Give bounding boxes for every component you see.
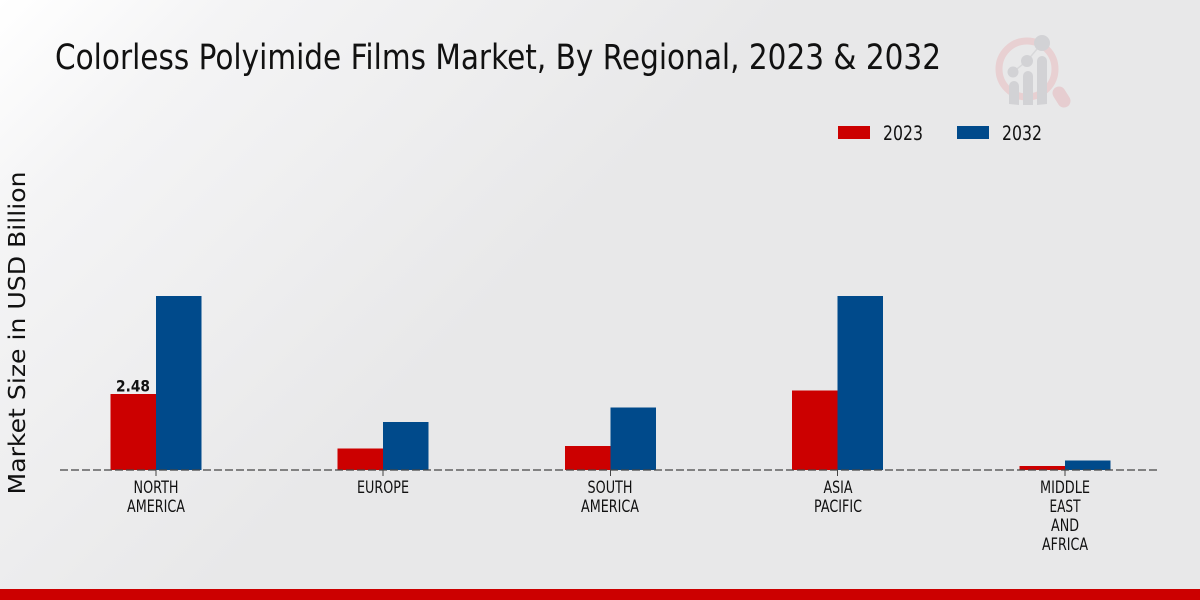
legend item: 2032: 2032	[1002, 122, 1042, 145]
category label: Middle East and Africa: MIDDLE	[1040, 478, 1090, 498]
legend item: 2023: 2023	[883, 122, 923, 145]
legend	[838, 122, 1042, 145]
category label: Asia Pacific: ASIA	[824, 478, 853, 498]
footer bar	[0, 589, 1200, 600]
category label: North America: AMERICA	[127, 497, 185, 517]
bar chart	[60, 296, 1160, 555]
category label: Middle East and Africa: EAST	[1050, 497, 1081, 517]
category label: North America: NORTH	[134, 478, 178, 498]
icon: watermark logo	[999, 35, 1064, 105]
category label: Middle East and Africa: AND	[1051, 516, 1079, 536]
bars: North America	[110, 296, 202, 470]
bars: Asia Pacific	[792, 296, 883, 470]
bars: South America	[565, 408, 656, 470]
title: Colorless Polyimide Films Market, By Regional, 2023 & 2032	[55, 38, 941, 78]
category label: South America: SOUTH	[588, 478, 632, 498]
category label: Middle East and Africa: AFRICA	[1042, 535, 1088, 555]
category label: South America: AMERICA	[581, 497, 639, 517]
data label: 2.48: 2.48	[116, 376, 150, 396]
y-axis title: Market Size in USD Billion	[3, 172, 31, 494]
bars: Europe	[338, 422, 428, 470]
category label: Asia Pacific: PACIFIC	[814, 497, 862, 517]
category label: Europe: EUROPE	[357, 478, 409, 498]
legend item: 2032	[957, 122, 1042, 145]
legend item: 2023	[838, 122, 923, 145]
bars: Middle East and Africa	[1020, 460, 1110, 470]
